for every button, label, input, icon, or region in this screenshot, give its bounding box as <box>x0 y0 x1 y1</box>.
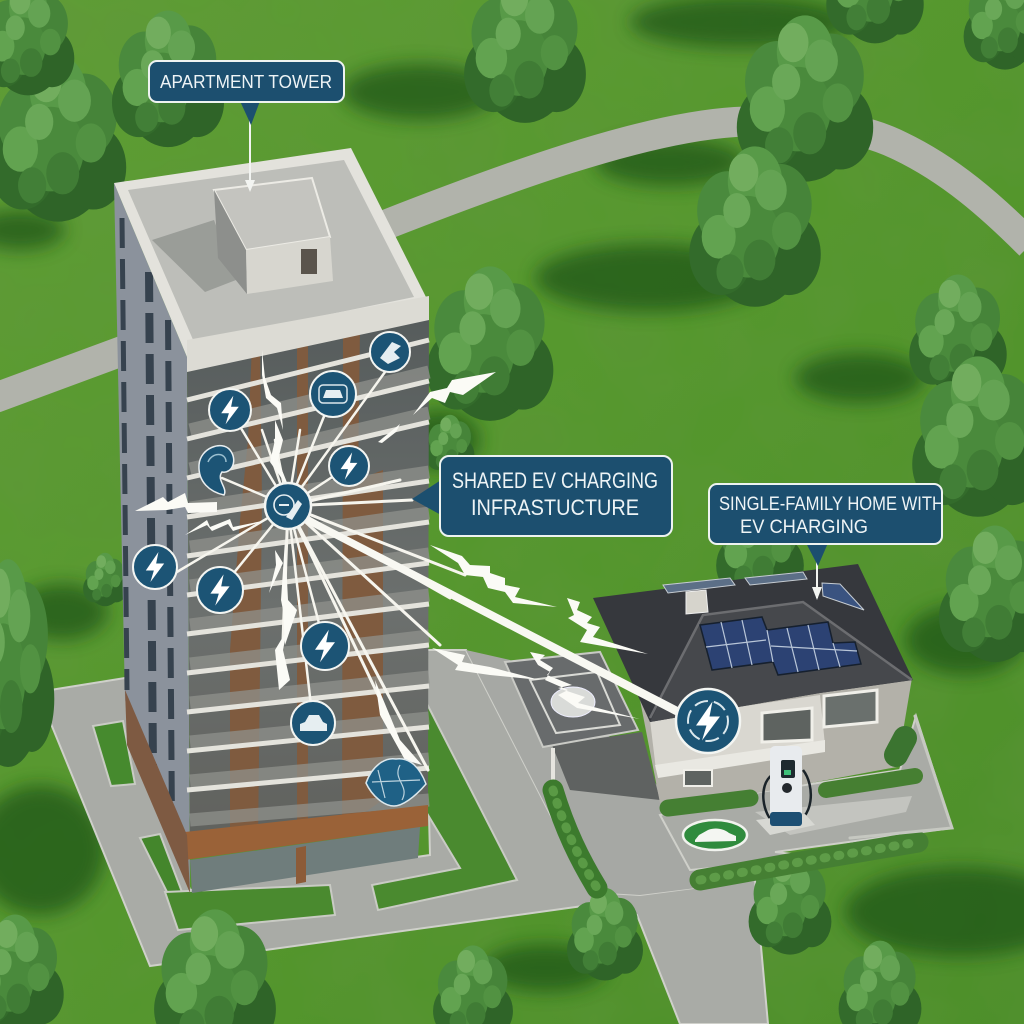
callout: single-family home with EV charging: EV CHARGING <box>740 517 868 538</box>
lightning bolts <box>135 350 648 765</box>
icon: car badge <box>310 371 356 417</box>
icon: lightning badge lower <box>301 622 349 670</box>
balcony floor bands <box>187 340 429 790</box>
charging and EV icon badges <box>133 332 740 806</box>
icon: folded map blob <box>366 759 426 806</box>
icon: lightning badge left <box>133 545 177 589</box>
apartment tower <box>114 148 429 893</box>
paved walkways around the tower <box>38 650 768 1024</box>
tower front face <box>187 303 429 858</box>
icon: plug badge top <box>370 332 410 372</box>
landscaped lawn beds at the tower base <box>93 700 517 930</box>
green EV parking pad <box>683 820 747 850</box>
single-family home <box>505 564 952 870</box>
callout: shared EV charging infrastructure <box>412 456 672 536</box>
tapered ray to the home charger <box>296 512 680 716</box>
icon: lightning badge lower left <box>197 567 243 613</box>
callout: single-family home with EV charging: SINGLE-FAMILY HOME WITH <box>719 494 944 515</box>
roof solar array <box>700 617 861 675</box>
curved footpath <box>0 121 1024 398</box>
house walls <box>640 678 912 803</box>
tower left side <box>114 183 190 893</box>
small roof solar panel <box>822 583 864 610</box>
icon: home charging badge <box>676 689 740 753</box>
rooftop access box <box>214 178 330 250</box>
icon: car badge lower <box>291 701 335 745</box>
roof <box>593 564 913 722</box>
hedges <box>553 716 952 888</box>
callout: single-family home with EV charging <box>709 484 944 600</box>
driveway and home forecourt <box>660 716 952 870</box>
balcony rail shading <box>190 372 429 820</box>
icon: curved cable blob <box>199 446 234 495</box>
tower roof <box>114 148 429 357</box>
chimney <box>686 590 708 614</box>
EV charging station <box>756 746 815 835</box>
timber podium band and glazed ground floor <box>185 805 428 860</box>
callout: shared EV charging infrastructure: SHARED EV CHARGING <box>452 468 658 493</box>
rear small solar panels <box>663 578 735 593</box>
timber cladding columns <box>230 328 383 845</box>
icon: central charging hub <box>265 483 311 529</box>
radiating energy rays from the charging hub <box>155 372 465 770</box>
carport with EV on the roof pad <box>505 652 638 780</box>
icon: lightning badge right <box>329 446 369 486</box>
house windows <box>824 690 877 727</box>
callout: shared EV charging infrastructure: INFRASTUCTURE <box>471 495 639 520</box>
icon: lightning badge upper left <box>209 389 251 431</box>
callout: apartment tower <box>149 61 344 192</box>
callout: apartment tower: APARTMENT TOWER <box>160 72 332 92</box>
